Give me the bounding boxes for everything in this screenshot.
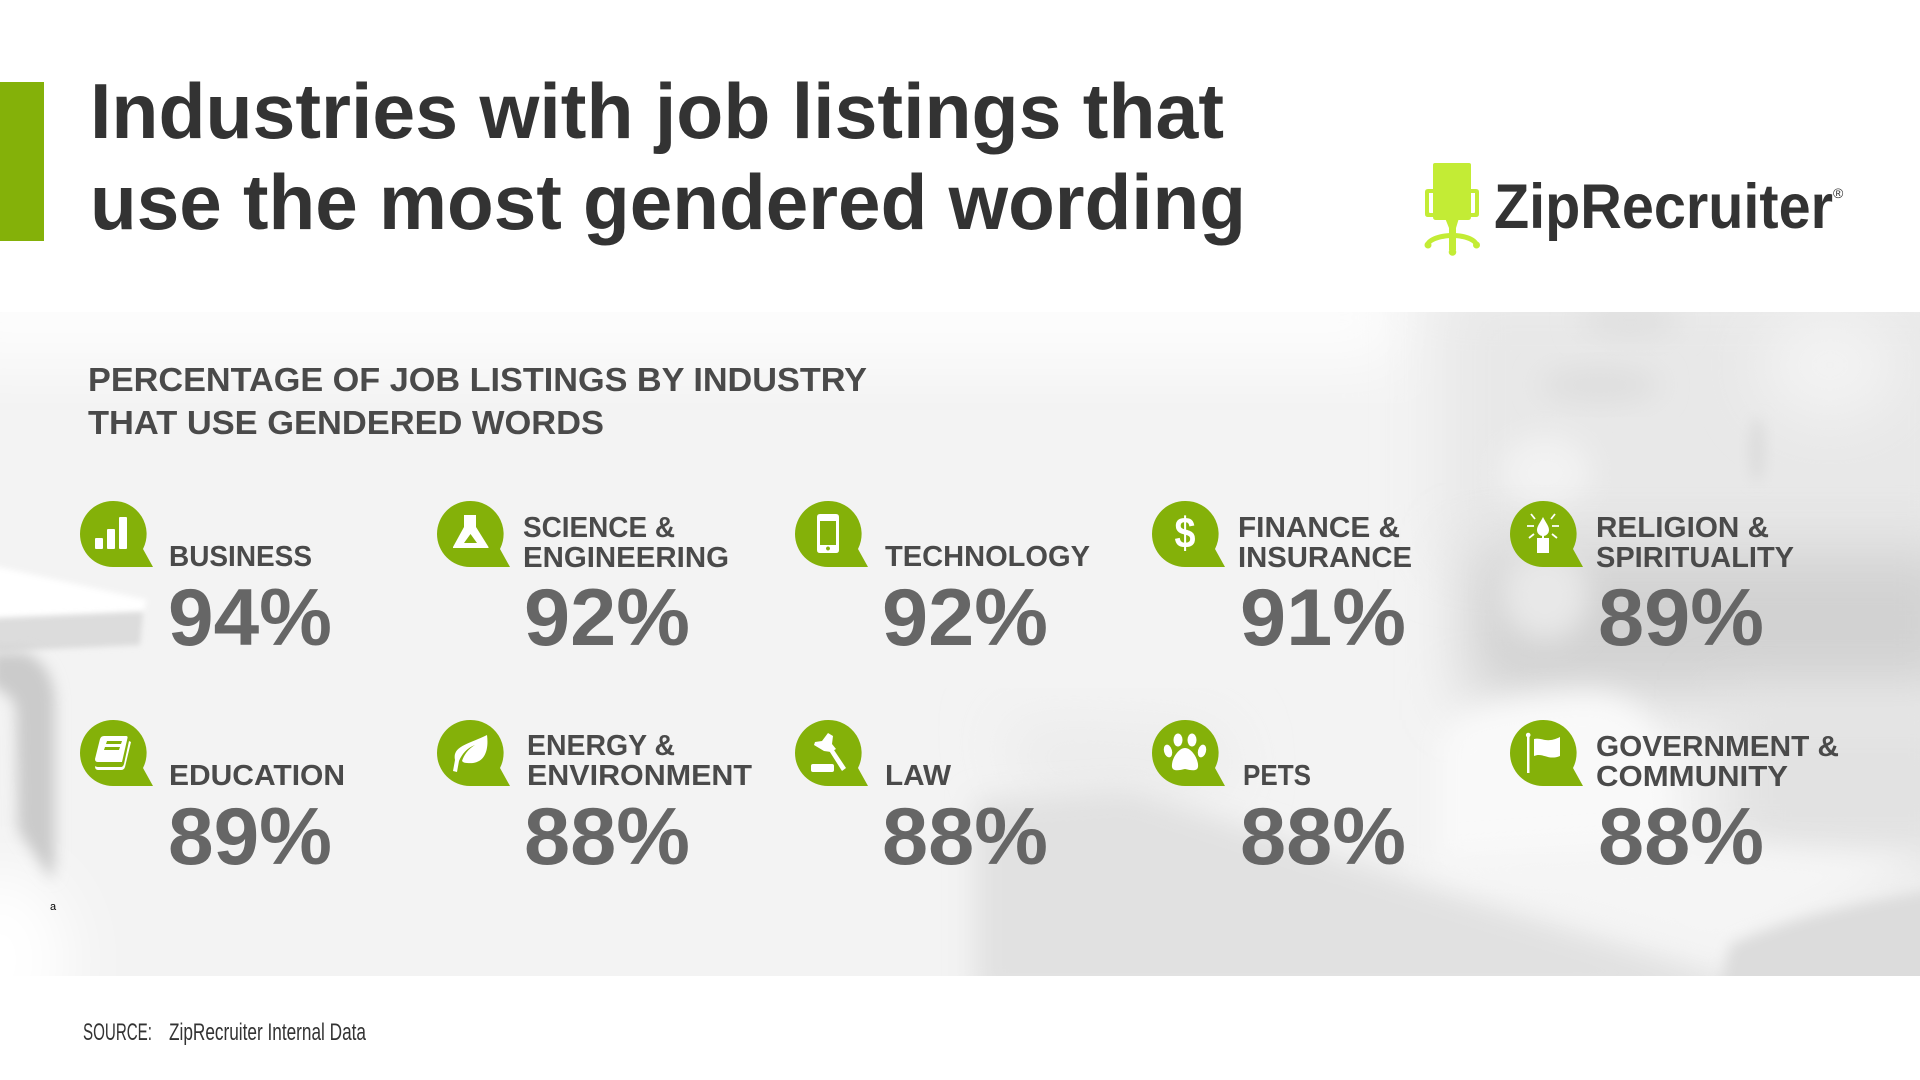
- value: 94%: [168, 573, 332, 663]
- item: science and engineering: [437, 501, 729, 663]
- stray footnote mark: a: [50, 901, 57, 913]
- icon: bar chart: [80, 501, 153, 567]
- icon: book: [80, 720, 153, 786]
- value: 88%: [882, 792, 1048, 882]
- value: 89%: [1598, 573, 1764, 663]
- value: 92%: [882, 573, 1048, 663]
- value: 88%: [1598, 792, 1764, 882]
- icon: candle: [1510, 501, 1583, 567]
- label: COMMUNITY: [1596, 761, 1788, 793]
- logo: ZipRecruiter: [1424, 163, 1844, 256]
- registered mark: ®: [1833, 185, 1844, 201]
- label: ENVIRONMENT: [527, 760, 752, 792]
- label: TECHNOLOGY: [885, 541, 1090, 573]
- item: finance and insurance: [1152, 501, 1412, 663]
- icon: dollar sign: $: [1174, 509, 1196, 558]
- value: 91%: [1240, 573, 1406, 663]
- label: [523, 512, 729, 574]
- label: FINANCE &: [1238, 512, 1400, 544]
- accent bar: [0, 82, 44, 241]
- item: business: [80, 501, 332, 663]
- label: RELIGION &: [1596, 512, 1769, 544]
- source note: [83, 1019, 366, 1046]
- source note: ZipRecruiter Internal Data: [169, 1019, 366, 1046]
- icon: chair: [1424, 163, 1480, 256]
- item: government and community: [1510, 720, 1839, 882]
- label: GOVERNMENT &: [1596, 731, 1839, 763]
- subheading: PERCENTAGE OF JOB LISTINGS BY INDUSTRY: [88, 361, 867, 398]
- icon: leaf: [437, 720, 510, 786]
- label: ENGINEERING: [523, 542, 729, 574]
- label: INSURANCE: [1238, 542, 1412, 574]
- background photo panel: [0, 312, 1920, 976]
- item: energy and environment: [437, 720, 752, 882]
- subheading: [88, 361, 867, 441]
- label: LAW: [885, 760, 952, 792]
- subheading: THAT USE GENDERED WORDS: [88, 404, 604, 441]
- label: [1596, 731, 1839, 793]
- label: [1596, 512, 1794, 574]
- label: [527, 730, 752, 792]
- title: Industries with job listings that: [90, 67, 1224, 155]
- icon: paw: [1152, 720, 1225, 786]
- title: use the most gendered wording: [90, 158, 1246, 246]
- value: 88%: [524, 792, 690, 882]
- label: ENERGY &: [527, 730, 675, 762]
- item: education: [80, 720, 345, 882]
- icon: gavel: [795, 720, 868, 786]
- label: [1238, 512, 1412, 574]
- title: [90, 67, 1246, 246]
- value: 89%: [168, 792, 332, 882]
- label: SCIENCE &: [523, 512, 675, 544]
- item: law: [795, 720, 1048, 882]
- item: religion and spirituality: [1510, 501, 1794, 663]
- label: EDUCATION: [169, 760, 345, 792]
- wordmark: ZipRecruiter: [1494, 172, 1833, 242]
- icon: flask: [437, 501, 510, 567]
- label: SPIRITUALITY: [1596, 542, 1794, 574]
- icon: flag: [1510, 720, 1583, 786]
- value: 92%: [524, 573, 690, 663]
- source note: SOURCE:: [83, 1019, 152, 1046]
- value: 88%: [1240, 792, 1406, 882]
- label: BUSINESS: [169, 541, 312, 573]
- item: technology: [795, 501, 1090, 663]
- item: pets: [1152, 720, 1406, 882]
- label: PETS: [1243, 760, 1311, 792]
- icon: phone: [795, 501, 868, 567]
- icon: dollar sign: [1152, 501, 1225, 567]
